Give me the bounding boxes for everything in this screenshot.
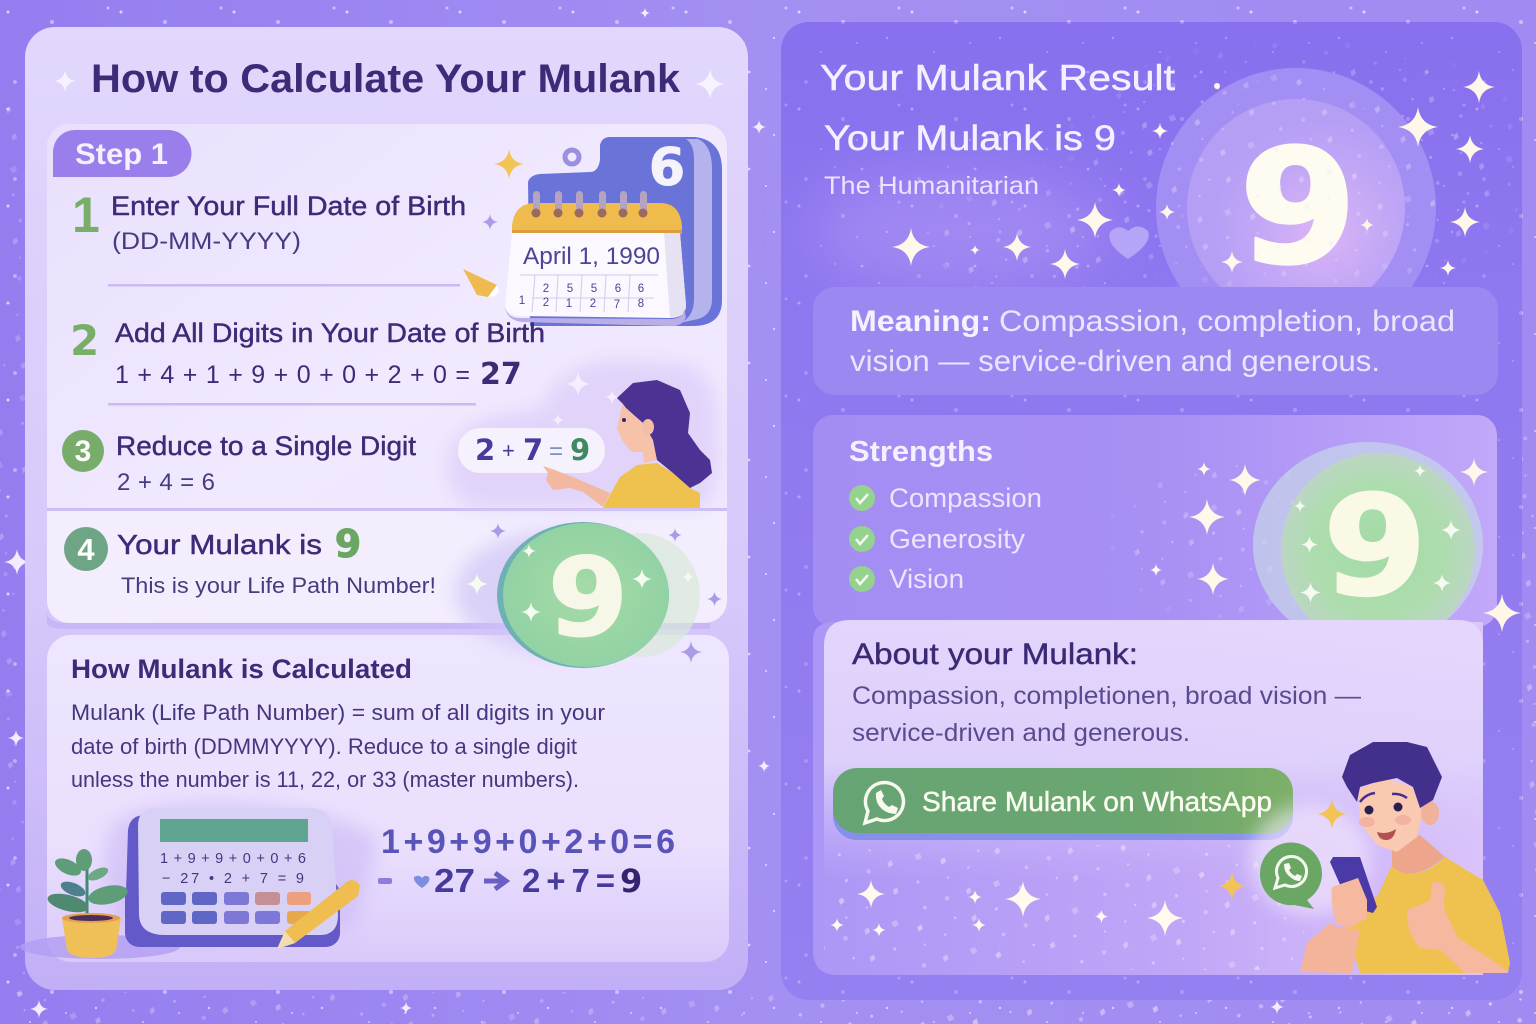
panel: strengths: Strengths [849,436,993,468]
step 2 text: 27 [480,357,522,392]
calculation equations: 27 [434,862,475,899]
illustration: calendar [463,137,722,326]
equation pill: 9 [570,433,590,467]
panel: how mulank is calculated: How Mulank is Calculated [71,654,412,684]
icon: heart [1109,226,1149,259]
step 4 text: 9 [335,522,361,566]
illustration: calendar: 2 [543,297,549,309]
about text: Compassion, completionen, broad vision — [852,682,1361,710]
about text [852,638,1361,747]
step 4 text [64,522,436,598]
illustration: girl with equation [448,360,718,508]
result headings: Your Mulank Result [820,57,1175,98]
right edge sparkle [1483,594,1521,632]
panel: how mulank is calculated [20,635,729,962]
calculation equations: 9 [620,862,642,900]
step 4 text: This is your Life Path Number! [121,573,436,598]
step 1 text [72,187,466,286]
icon: whatsapp bubble [1260,842,1322,909]
illustration: calculator: − 27 • 2 + 7 = 9 [162,871,304,887]
illustration: calendar: 5 [591,283,597,295]
about text: service-driven and generous. [852,719,1190,747]
explanation text: unless the number is 11, 22, or 33 (master numbers). [71,767,579,792]
step 3 text [62,430,417,496]
step 2 text [70,316,545,406]
title: How to Calculate Your Mulank [91,57,681,101]
icon: whatsapp [865,783,903,823]
about text: About your Mulank: [852,638,1138,671]
illustration: calendar: 8 [638,298,644,310]
illustration: calendar: 1 [566,298,572,310]
step 3 text: 2 + 4 = 6 [117,469,215,496]
strengths list: Generosity [889,524,1026,554]
illustration: calculator [20,804,378,959]
green nine badge right [1253,442,1483,648]
result headings: Your Mulank is 9 [824,119,1116,158]
step 3 text: 3 [75,435,91,468]
equation pill: 7 [523,433,543,467]
step 2 text: 2 [70,316,99,365]
illustration: calendar: 6 [638,283,644,295]
equation pill: = [549,438,563,465]
strengths list: Vision [889,564,964,594]
step 3 text: Reduce to a Single Digit [116,431,417,461]
equation pill: + [502,438,515,463]
green nine badge [455,522,722,668]
calculation equations [378,823,675,900]
big nine badge: 9 [1239,116,1357,300]
step 1 text: 1 [72,187,100,243]
panel: meaning: Meaning: [850,305,991,338]
explanation text: Mulank (Life Path Number) = sum of all digits in your [71,700,605,725]
step 1 text: (DD-MM-YYYY) [112,228,301,255]
step pill: Step 1 [75,138,168,171]
illustration: calendar: 6 [649,138,685,198]
illustration: calendar: 2 [543,283,549,295]
calculation equations: 2+7= [522,862,615,899]
illustration: calculator: 1 + 9 + 9 + 0 + 0 + 6 [160,851,306,867]
panel: meaning: vision — service-driven and generous. [850,345,1380,378]
step 4 text: Your Mulank is [117,529,322,560]
panel: strengths [813,415,1497,630]
illustration: calendar: 5 [567,283,573,295]
equation pill [458,428,605,473]
illustration: calendar: 1 [519,295,525,307]
illustration: calendar: 7 [614,299,620,311]
illustration: boy with phone [1218,742,1510,973]
panel: meaning [813,287,1498,395]
strengths list: Compassion [889,483,1042,513]
equation pill: 2 [475,433,495,467]
green nine badge right: 9 [1323,466,1427,627]
result headings: The Humanitarian [824,172,1039,200]
illustration: plant [46,849,129,958]
panel: your mulank result [781,22,1522,1000]
explanation text [71,700,605,792]
panel: meaning: Compassion, completion, broad [999,305,1455,338]
result headings [820,57,1175,200]
sparkles top [880,40,1520,290]
step 2 text: Add All Digits in Your Date of Birth [115,318,545,348]
step pill [53,130,191,177]
panel: about your mulank [813,620,1510,975]
step 1 text: Enter Your Full Date of Birth [111,191,466,221]
button: share on whatsapp [833,768,1293,840]
illustration: calendar: April 1, 1990 [523,243,660,270]
step 4 text: 4 [77,532,95,567]
big nine badge [1156,68,1436,348]
calculation equations: 1+9+9+0+2+0=6 [381,823,675,861]
illustration: calendar: 2 [590,298,596,310]
step 2 text: 1 + 4 + 1 + 9 + 0 + 0 + 2 + 0 = [115,361,470,389]
panel: steps card [47,124,727,629]
illustration: calendar: 6 [615,283,621,295]
explanation text: date of birth (DDMMYYYY). Reduce to a single digit [71,734,577,759]
green nine badge: 9 [548,536,628,661]
button: share on whatsapp: Share Mulank on WhatsApp [922,786,1272,817]
panel: how to calculate [20,27,748,990]
strengths list [849,483,1042,594]
